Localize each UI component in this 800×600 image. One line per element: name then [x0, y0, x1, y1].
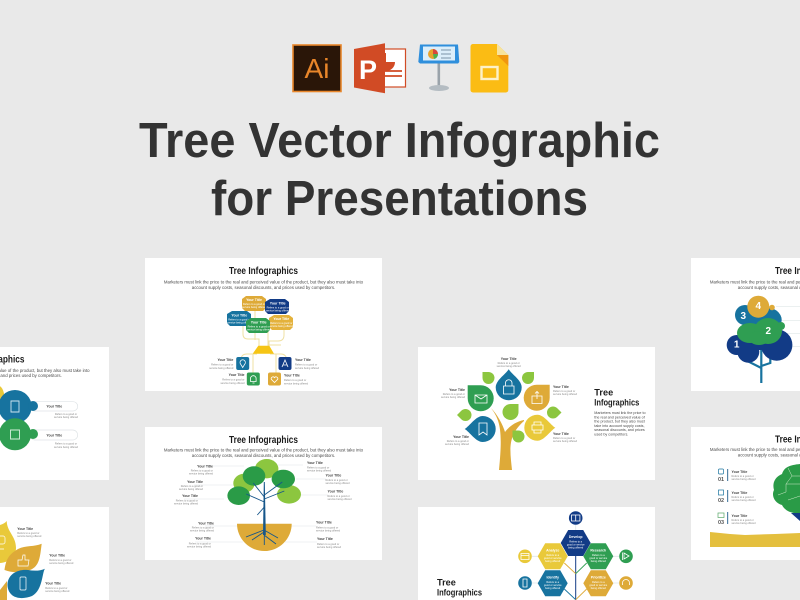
label: soil right 1: service being offered: [316, 528, 341, 532]
label 2: Refers to a good or: [732, 495, 754, 499]
bubble: green: Your Title: [251, 320, 267, 324]
description: the real and perceived value of: [594, 415, 646, 419]
icon: 02: 02: [718, 498, 724, 504]
label: right 1: service being offered: [307, 468, 332, 472]
label: bottom left: [220, 373, 245, 385]
label: bottom right: service being offered: [284, 382, 309, 386]
hexagon: analyze: good or service: [544, 556, 562, 560]
label: soil left 2: Your Title: [195, 536, 211, 540]
hexagon: identify: being offered: [545, 586, 561, 590]
label: soil left 1: Refers to a good or: [192, 526, 214, 530]
label: soil left 1: service being offered: [190, 528, 215, 532]
label: lower right: Refers to a good or: [553, 436, 575, 440]
label: top left: [209, 358, 234, 370]
trunk stem: [263, 482, 266, 535]
bubble: navy: [265, 299, 290, 314]
panel: tree with teardrop leaves: [418, 347, 655, 480]
label 1: Your Title: [732, 470, 747, 474]
hexagon: prioritize: Refers to a: [592, 580, 605, 584]
icon: Adobe Illustrator: [293, 45, 341, 92]
description: seasonal discounts, and prices: [594, 428, 645, 432]
label: left 1: service being offered: [189, 472, 214, 476]
label 3: service being offered: [732, 521, 756, 525]
bubble: green: [246, 318, 271, 333]
blue node: [0, 390, 38, 423]
hexagon: develop: [561, 530, 591, 556]
label: lower right: [553, 432, 578, 443]
label: bottom right: [284, 374, 309, 386]
label: soil left 2: Refers to a good or: [189, 542, 211, 546]
leaf: share: [524, 385, 550, 411]
foliage: 1 navy: [727, 329, 792, 363]
label 1: Refers to a good or: [17, 531, 40, 535]
leaf: bookmark: [465, 416, 496, 442]
description: account supply costs, seasonal discounts, and prices used by competitors.: [192, 453, 335, 458]
trunk: [791, 513, 800, 521]
branch: research: [576, 563, 587, 574]
label: left 3: Refers to a good or: [176, 498, 198, 502]
gold leaf: [4, 544, 42, 572]
icon: Google Slides: [470, 44, 508, 92]
label: lower right: service being offered: [553, 439, 578, 443]
label 2: Refers to a good or: [49, 558, 72, 562]
label bottom: service being offered: [54, 445, 79, 449]
panel: hexagon tree: [418, 507, 655, 600]
label bottom: Refers to a good or: [55, 442, 77, 446]
label: upper left: service being offered: [441, 395, 466, 399]
branch: identify: [564, 589, 576, 600]
heading: Tree Infographics: [229, 266, 298, 277]
numbers: 3: [741, 311, 747, 322]
hexagon: research: [583, 543, 613, 569]
label 1: service being offered: [732, 477, 756, 481]
label: soil right 2: service being offered: [317, 545, 342, 549]
ground band: [710, 532, 800, 547]
trunk: [575, 530, 577, 600]
soil: [237, 524, 292, 551]
hexagon: identify: good or service: [544, 583, 562, 587]
label: top: [497, 357, 521, 368]
label: upper right: [553, 385, 578, 396]
bubble: gold: Refers to a good or: [243, 302, 265, 306]
label 1: service being offered: [17, 534, 42, 538]
branch: analyze: [564, 563, 576, 574]
bubble: gold right: Refers to a good or: [270, 321, 293, 325]
icon: PowerPoint: P: [359, 55, 377, 85]
side connectors: [532, 525, 619, 583]
icon: thumbs up: [18, 555, 29, 566]
label: upper left: Your Title: [449, 388, 465, 392]
icon: PowerPoint: [354, 43, 406, 93]
small leaves: [457, 372, 561, 442]
title: Tree Vector Infographic: [139, 114, 660, 168]
icon: 03: 03: [718, 520, 724, 526]
trunk: [749, 350, 770, 383]
label top: [46, 405, 79, 419]
label: lower left: Refers to a good or: [447, 439, 469, 443]
label 1: Your Title: [17, 527, 33, 531]
label: left 1: [189, 464, 214, 476]
label 3: Your Title: [45, 582, 61, 586]
hexagon: analyze: being offered: [545, 559, 561, 563]
label top: service being offered: [54, 415, 79, 419]
label 1: [17, 527, 42, 538]
label: top right: service being offered: [295, 366, 320, 370]
branch: prioritize: [576, 589, 587, 600]
hexagon: develop: Develop: [569, 535, 583, 539]
hexagon: identify: Refers to a: [546, 580, 560, 584]
hexagon: research: good or service: [589, 556, 608, 560]
icon circle: video: [619, 550, 633, 563]
bubble: green: Refers to a good or: [248, 324, 270, 328]
bubble: blue: Refers to a good or: [228, 318, 251, 322]
bubble: blue: service being offered: [227, 320, 252, 324]
leaf: lock: [496, 369, 522, 400]
heading: Tree: [437, 578, 456, 588]
label: upper left: [441, 388, 466, 399]
heading: Tree: [594, 388, 613, 398]
bubble: gold: service being offered: [242, 305, 267, 309]
panel: circle tree (cropped left): [0, 347, 109, 480]
title: for Presentations: [211, 172, 588, 226]
label 2: Your Title: [49, 554, 65, 558]
icon: Keynote: [418, 44, 459, 91]
label: left 3: service being offered: [174, 502, 199, 506]
numbers: 4: [756, 301, 762, 312]
label: soil left 2: [187, 536, 212, 548]
label: soil right 1: [316, 520, 341, 532]
label: lower left: service being offered: [445, 442, 470, 446]
panel: numbered tree (cropped right): [691, 258, 800, 391]
label 3: [45, 582, 70, 593]
label: top right: Your Title: [295, 358, 311, 362]
blue leaf: [7, 569, 45, 598]
leader lines: [184, 465, 328, 542]
title: [139, 114, 660, 226]
description: Marketers must link the price to the real and perceived value of the product, but they also must take into: [164, 448, 364, 452]
label: right 2: [326, 474, 350, 485]
label: bottom left: Your Title: [229, 373, 245, 377]
label 2: Your Title: [732, 491, 747, 495]
label 1: [732, 470, 756, 481]
hexagon: develop: good or service: [567, 542, 585, 546]
label bottom: Your Title: [46, 433, 62, 437]
label: top left: service being offered: [209, 366, 234, 370]
label: lower right: Your Title: [553, 432, 569, 436]
icon: pin: [236, 357, 249, 370]
hexagon: research: Research: [590, 548, 606, 552]
label: soil right 2: Your Title: [317, 537, 333, 541]
bubble: green: service being offered: [247, 328, 271, 332]
label: top: Your Title: [501, 357, 517, 361]
description: take into account supply costs,: [594, 424, 645, 428]
hexagon: prioritize: [583, 570, 613, 596]
description: the product, but they also must: [594, 420, 645, 424]
label: right 3: Refers to a good or: [328, 494, 350, 498]
hexagon: develop: being offered: [568, 546, 584, 550]
yellow node: [0, 385, 4, 411]
hexagon: prioritize: good or service: [589, 583, 608, 587]
heading: [437, 578, 482, 598]
label: soil right 2: Refers to a good or: [317, 542, 339, 546]
leader lines: [776, 307, 800, 347]
label: top right: [295, 358, 320, 370]
label: lower left: Your Title: [453, 435, 469, 439]
icon: 03: [718, 513, 724, 526]
icon circle: top: [569, 511, 582, 525]
label: left 2: service being offered: [179, 487, 204, 491]
label: bottom right: Your Title: [284, 374, 300, 378]
label: right 3: Your Title: [328, 490, 343, 494]
hexagon: prioritize: Prioritize: [591, 576, 606, 580]
label: left 2: [179, 480, 204, 491]
bubble: blue: [227, 311, 252, 326]
label: left 1: Refers to a good or: [191, 468, 213, 472]
label: upper right: Refers to a good or: [553, 389, 575, 393]
label: left 3: Your Title: [182, 494, 198, 498]
label: left 3: [174, 494, 199, 506]
icon: 01: 01: [718, 477, 724, 483]
foliage: 2 green: [737, 318, 785, 345]
label 3: Your Title: [732, 514, 747, 518]
label top: Refers to a good or: [55, 412, 77, 416]
trunk: [253, 346, 274, 354]
hexagon: analyze: [538, 543, 568, 569]
icon circle: clipboard: [518, 576, 532, 590]
hexagon: research: Refers to a: [592, 553, 605, 557]
bubble: gold right: Your Title: [273, 317, 289, 321]
label 3: service being offered: [45, 589, 70, 593]
label 3: Refers to a good or: [45, 586, 68, 590]
hexagon: identify: Identify: [546, 576, 559, 580]
icon: heart: [268, 372, 281, 386]
pill: top: [30, 402, 78, 411]
leaf: mail: [468, 385, 494, 411]
tree trunk: [491, 408, 524, 470]
label 1: Refers to a good or: [732, 474, 754, 478]
numbers: [734, 301, 772, 350]
label: top: Refers to a good or: [498, 361, 520, 365]
label: upper left: Refers to a good or: [443, 392, 465, 396]
hexagon: identify: [538, 570, 568, 596]
gold leaf lower: [0, 581, 7, 600]
label: top left: Refers to a good or: [211, 362, 233, 366]
icon circle: headset: [619, 576, 633, 590]
label: right 3: [328, 490, 352, 501]
label: right 2: Your Title: [326, 474, 341, 478]
hexagon: research: being offered: [591, 559, 606, 563]
heading: Infographics: [594, 398, 639, 408]
numbers: 1: [734, 340, 740, 350]
bubble: navy: service being offered: [266, 308, 290, 312]
icon: bell: [247, 372, 260, 386]
panel: puzzle tree (cropped right): [691, 427, 800, 560]
label bottom: [46, 433, 79, 449]
roots and branches: [246, 482, 284, 545]
pill: bottom: [30, 430, 78, 440]
icon: 02: [718, 490, 724, 504]
label: left 2: Refers to a good or: [181, 484, 203, 488]
heading: Tree Infographics: [229, 435, 298, 446]
label: bottom left: Refers to a good or: [222, 378, 245, 382]
canopy: [227, 459, 301, 505]
label 2: service being offered: [49, 561, 74, 565]
icon: microphone: [0, 536, 5, 549]
bubble: gold right: [269, 315, 294, 330]
icon: phone: [20, 577, 26, 590]
heading: [594, 388, 639, 408]
branches: [241, 310, 287, 379]
item bars: [727, 469, 729, 524]
description: account supply costs, seasonal discounts, and prices used by competitors.: [192, 285, 335, 290]
yellow leaf: [0, 521, 16, 563]
label: soil right 1: Refers to a good or: [316, 526, 338, 530]
label 3: Refers to a good or: [732, 518, 754, 522]
label: upper right: Your Title: [553, 385, 569, 389]
description: Marketers must link the price to: [594, 411, 646, 415]
label 2: [732, 491, 756, 502]
label top: Your Title: [46, 405, 62, 409]
numbers: 2: [766, 326, 772, 337]
heading: Infographics: [437, 588, 482, 598]
label: right 1: Your Title: [307, 461, 323, 465]
label: right 1: [307, 461, 332, 472]
panel: leaf tree (cropped left): [0, 507, 109, 600]
label: top: service being offered: [497, 364, 521, 368]
bubble: blue: Your Title: [231, 314, 247, 318]
label: soil right 1: Your Title: [316, 520, 332, 524]
label 2: [49, 554, 74, 565]
green node: [0, 418, 38, 450]
label: soil left 1: Your Title: [198, 522, 214, 526]
canopy veins: [778, 468, 800, 500]
foliage: 3 blue: [735, 305, 782, 333]
icon circle: store: [518, 550, 532, 563]
bubble: gold: Your Title: [246, 298, 262, 302]
hexagon: analyze: Analyze: [546, 548, 559, 552]
label: top left: Your Title: [217, 358, 233, 362]
label: bottom left: service being offered: [220, 381, 245, 385]
hexagon: prioritize: being offered: [591, 586, 606, 590]
panel: tree with roots: [145, 427, 382, 560]
label: right 1: Refers to a good or: [307, 466, 329, 470]
icon: 01: [718, 469, 724, 483]
icon: Adobe Illustrator: Ai: [305, 53, 329, 84]
description: Marketers must link the price to the real and perceived value of the product, but they also must take into: [164, 279, 364, 284]
bubble: navy: Refers to a good or: [267, 306, 289, 310]
label: top right: Refers to a good or: [295, 362, 317, 366]
hexagon: develop: Refers to a: [569, 540, 583, 544]
description: used by competitors.: [594, 432, 628, 436]
label: lower left: [445, 435, 470, 446]
label: bottom right: Refers to a good or: [284, 378, 306, 382]
label: left 1: Your Title: [197, 464, 213, 468]
bubble: gold: [242, 296, 267, 311]
icon: letter: [278, 357, 292, 370]
foliage: 4 gold: [747, 296, 775, 318]
label: soil left 1: [190, 522, 215, 532]
bubble: navy: Your Title: [270, 302, 286, 306]
label: right 3: service being offered: [328, 497, 352, 501]
leaf: printer: [524, 415, 555, 441]
hexagon: analyze: Refers to a: [546, 553, 560, 557]
canopy: [773, 464, 800, 513]
label: upper right: service being offered: [553, 392, 578, 396]
label: soil left 2: service being offered: [187, 544, 212, 548]
bubble: gold right: service being offered: [269, 324, 294, 328]
label: right 2: Refers to a good or: [326, 478, 348, 482]
label 3: [732, 514, 756, 525]
panel: tree with flowchart bubbles: [145, 258, 382, 391]
label: left 2: Your Title: [187, 480, 203, 484]
label: right 2: service being offered: [326, 481, 350, 485]
label 2: service being offered: [732, 498, 756, 502]
label: soil right 2: [317, 537, 342, 549]
